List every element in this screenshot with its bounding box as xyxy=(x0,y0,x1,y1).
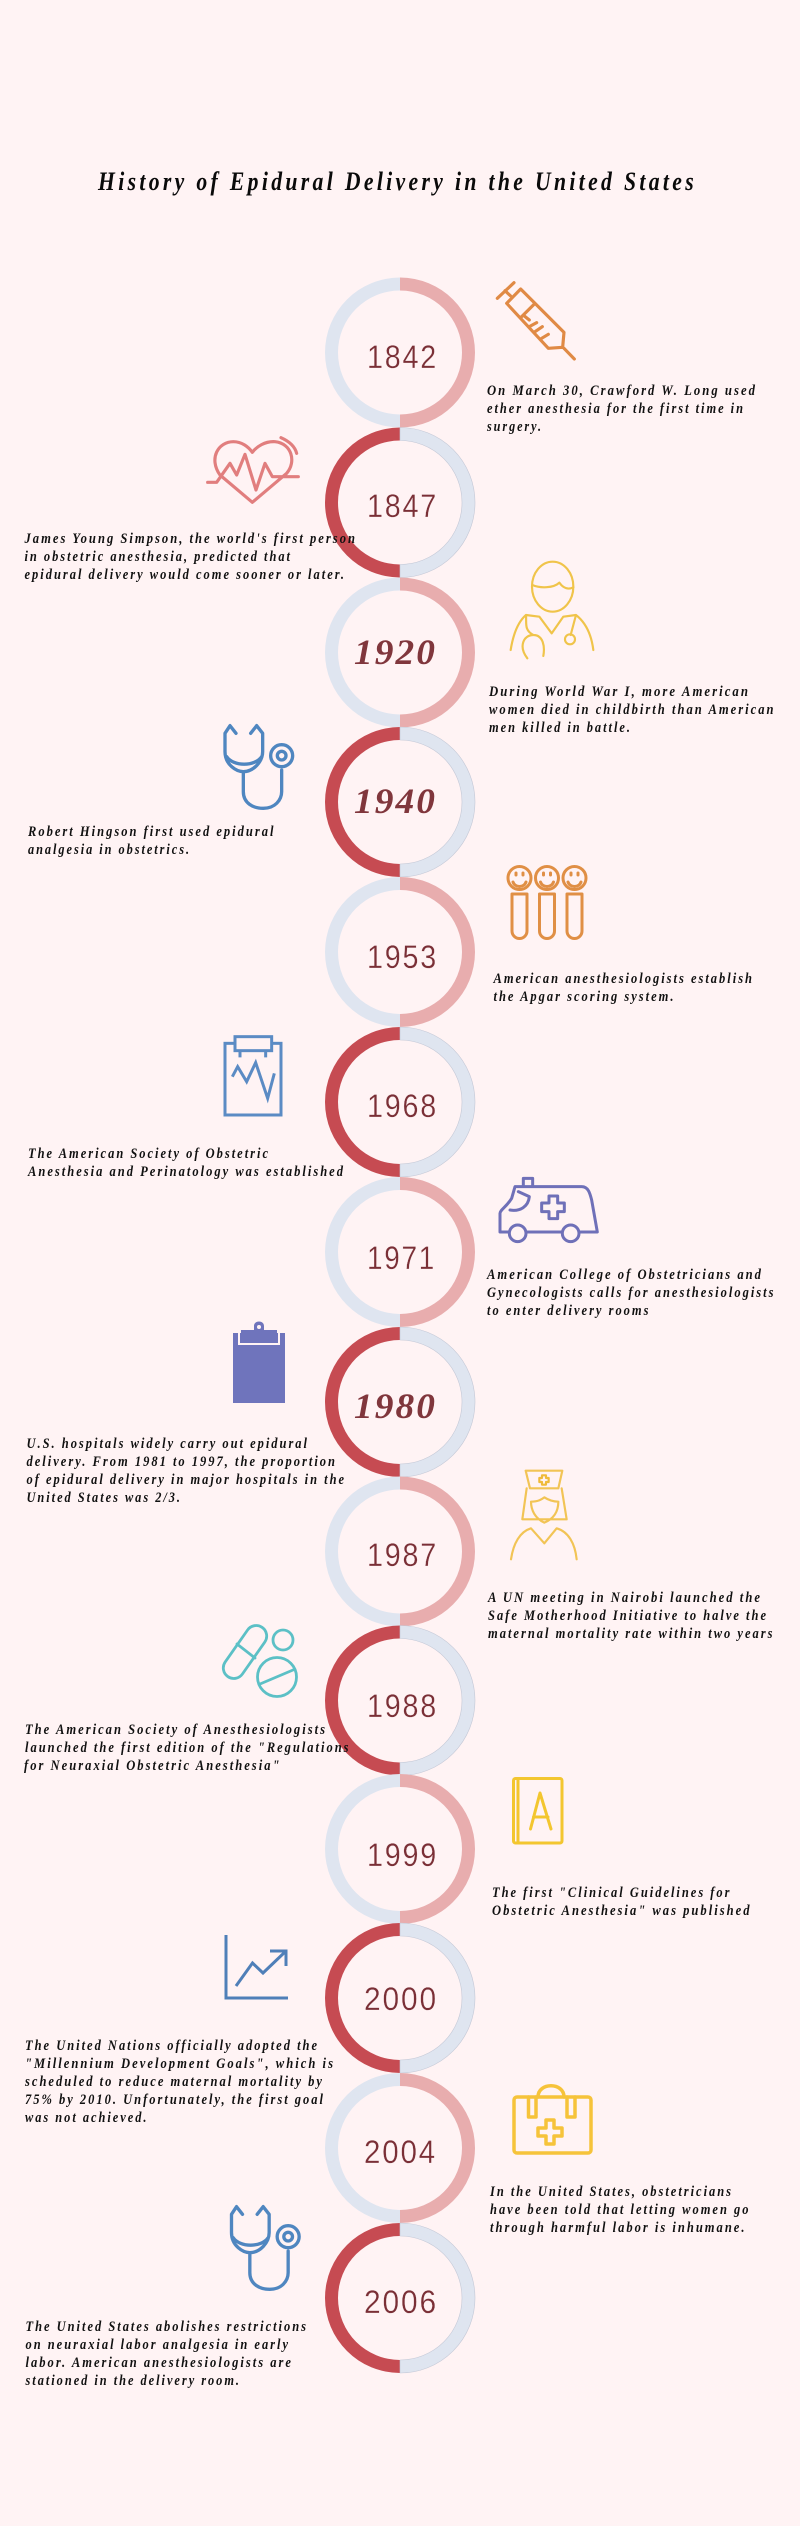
description: 1980: U.S. hospitals widely carry out epidural xyxy=(26,1436,309,1452)
description: 1988: for Neuraxial Obstetric Anesthesia" xyxy=(24,1758,282,1774)
ring: 2000 xyxy=(325,1923,475,2073)
ring: 1999 xyxy=(325,1774,475,1924)
description: 1940: analgesia in obstetrics. xyxy=(28,842,191,858)
description: 1953: the Apgar scoring system. xyxy=(494,989,676,1005)
description: 2000: was not achieved. xyxy=(25,2110,148,2126)
description: 1842: surgery. xyxy=(486,419,543,435)
year: 1842: 1842 xyxy=(367,339,438,375)
event: 1953 xyxy=(325,866,754,1027)
description: 1999 xyxy=(492,1885,752,1919)
event: 1847 xyxy=(24,428,475,583)
event: 2006 xyxy=(25,2207,475,2389)
ring: 1920 xyxy=(325,578,475,728)
description: 2006: stationed in the delivery room. xyxy=(25,2373,241,2389)
description: 1999: The first "Clinical Guidelines for xyxy=(492,1885,732,1901)
ring: 1971 xyxy=(325,1177,475,1327)
description: 1847: epidural delivery would come sooner or later. xyxy=(24,567,346,583)
description: 2000 xyxy=(24,2038,335,2126)
description: 1842: On March 30, Crawford W. Long used xyxy=(487,383,757,399)
event: 1980 xyxy=(26,1322,475,1506)
year: 2004: 2004 xyxy=(364,2134,437,2170)
description: 1980: United States was 2/3. xyxy=(26,1490,182,1506)
event: 1940 xyxy=(27,726,475,877)
event: 1920 xyxy=(325,562,776,736)
year: 1971: 1971 xyxy=(367,1240,436,1276)
description: 1971: to enter delivery rooms xyxy=(487,1303,650,1319)
icon: heart with pulse xyxy=(208,438,298,502)
description: 1971 xyxy=(486,1267,776,1319)
icon: medical bag xyxy=(514,2086,591,2153)
description: 2006 xyxy=(25,2319,308,2389)
title: History of Epidural Delivery in the United States xyxy=(97,167,697,196)
event: 1842 xyxy=(325,278,757,435)
icon: chart clipboard xyxy=(225,1037,281,1115)
icon: stethoscope xyxy=(231,2207,299,2289)
ring: 1988 xyxy=(325,1626,475,1776)
description: 2000: The United Nations officially adopted the xyxy=(25,2038,319,2054)
description: 2000: scheduled to reduce maternal mortality by xyxy=(24,2074,324,2090)
icon: doctor xyxy=(511,562,593,658)
description: 1842: ether anesthesia for the first time in xyxy=(487,401,745,417)
description: 1987 xyxy=(487,1590,774,1642)
year: 1920: 1920 xyxy=(354,632,437,672)
icon: book xyxy=(514,1778,562,1843)
description: 1953 xyxy=(493,971,754,1005)
year: 1987: 1987 xyxy=(367,1537,438,1573)
ring: 1987 xyxy=(325,1476,475,1626)
ring: 1968 xyxy=(325,1027,475,1177)
description: 2006: labor. American anesthesiologists are xyxy=(26,2355,293,2371)
year: 1953: 1953 xyxy=(367,939,438,975)
icon: smiley test tubes xyxy=(508,866,586,939)
description: 1968: The American Society of Obstetric xyxy=(28,1146,270,1162)
description: 1968 xyxy=(27,1146,345,1180)
icon: pills xyxy=(219,1621,296,1696)
year: 1847: 1847 xyxy=(367,488,438,524)
event: 1968 xyxy=(27,1027,475,1180)
year: 1940: 1940 xyxy=(354,781,437,821)
description: 2004: In the United States, obstetricians xyxy=(489,2184,733,2200)
description: 2004: through harmful labor is inhumane. xyxy=(490,2220,746,2236)
ring: 2006 xyxy=(325,2223,475,2373)
description: 1968: Anesthesia and Perinatology was established xyxy=(27,1164,345,1180)
description: 1999: Obstetric Anesthesia" was published xyxy=(492,1903,752,1919)
description: 2000: "Millennium Development Goals", which is xyxy=(25,2056,335,2072)
icon: syringe xyxy=(497,283,574,359)
ring: 1953 xyxy=(325,877,475,1027)
year: 2006: 2006 xyxy=(364,2284,438,2320)
description: 1953: American anesthesiologists establish xyxy=(493,971,754,987)
ring: 1842 xyxy=(325,278,475,428)
description: 1847: in obstetric anesthesia, predicted that xyxy=(24,549,292,565)
event: 1988 xyxy=(24,1621,475,1776)
event: 2000 xyxy=(24,1923,475,2126)
description: 1988: The American Society of Anesthesiologists xyxy=(25,1722,327,1738)
description: 1842 xyxy=(486,383,757,435)
description: 1847: James Young Simpson, the world's first person xyxy=(24,531,357,547)
description: 1920 xyxy=(488,684,776,736)
description: 2000: 75% by 2010. Unfortunately, the first goal xyxy=(25,2092,325,2108)
icon: growth chart xyxy=(226,1935,288,1998)
event: 1999 xyxy=(325,1774,752,1924)
description: 2004 xyxy=(489,2184,750,2236)
year: 1980: 1980 xyxy=(354,1386,437,1426)
description: 1920: During World War I, more American xyxy=(488,684,750,700)
description: 1988 xyxy=(24,1722,350,1774)
year: 1999: 1999 xyxy=(367,1837,438,1873)
description: 2006: The United States abolishes restrictions xyxy=(26,2319,308,2335)
icon: ambulance xyxy=(500,1178,597,1242)
ring: 1847 xyxy=(325,428,475,578)
year: 1968: 1968 xyxy=(367,1088,438,1124)
description: 1920: men killed in battle. xyxy=(489,720,632,736)
description: 1980: of epidural delivery in major hospitals in the xyxy=(26,1472,346,1488)
description: 2006: on neuraxial labor analgesia in early xyxy=(26,2337,290,2353)
icon: solid clipboard xyxy=(233,1322,285,1403)
event: 1971 xyxy=(325,1177,776,1327)
description: 1940: Robert Hingson first used epidural xyxy=(27,824,276,840)
description: 2004: have been told that letting women go xyxy=(490,2202,750,2218)
event: 2004 xyxy=(325,2073,750,2236)
description: 1940 xyxy=(27,824,276,858)
description: 1980: delivery. From 1981 to 1997, the proportion xyxy=(26,1454,337,1470)
ring: 1940 xyxy=(325,727,475,877)
description: 1980 xyxy=(26,1436,346,1506)
year: 2000: 2000 xyxy=(364,1981,438,2017)
icon: nurse xyxy=(511,1471,577,1559)
description: 1988: launched the first edition of the "Regulations xyxy=(25,1740,350,1756)
ring: 2004 xyxy=(325,2073,475,2223)
icon: stethoscope xyxy=(225,726,293,808)
year: 1988: 1988 xyxy=(367,1688,438,1724)
event: 1987 xyxy=(325,1471,774,1642)
description: 1847 xyxy=(24,531,357,583)
ring: 1980 xyxy=(325,1327,475,1477)
